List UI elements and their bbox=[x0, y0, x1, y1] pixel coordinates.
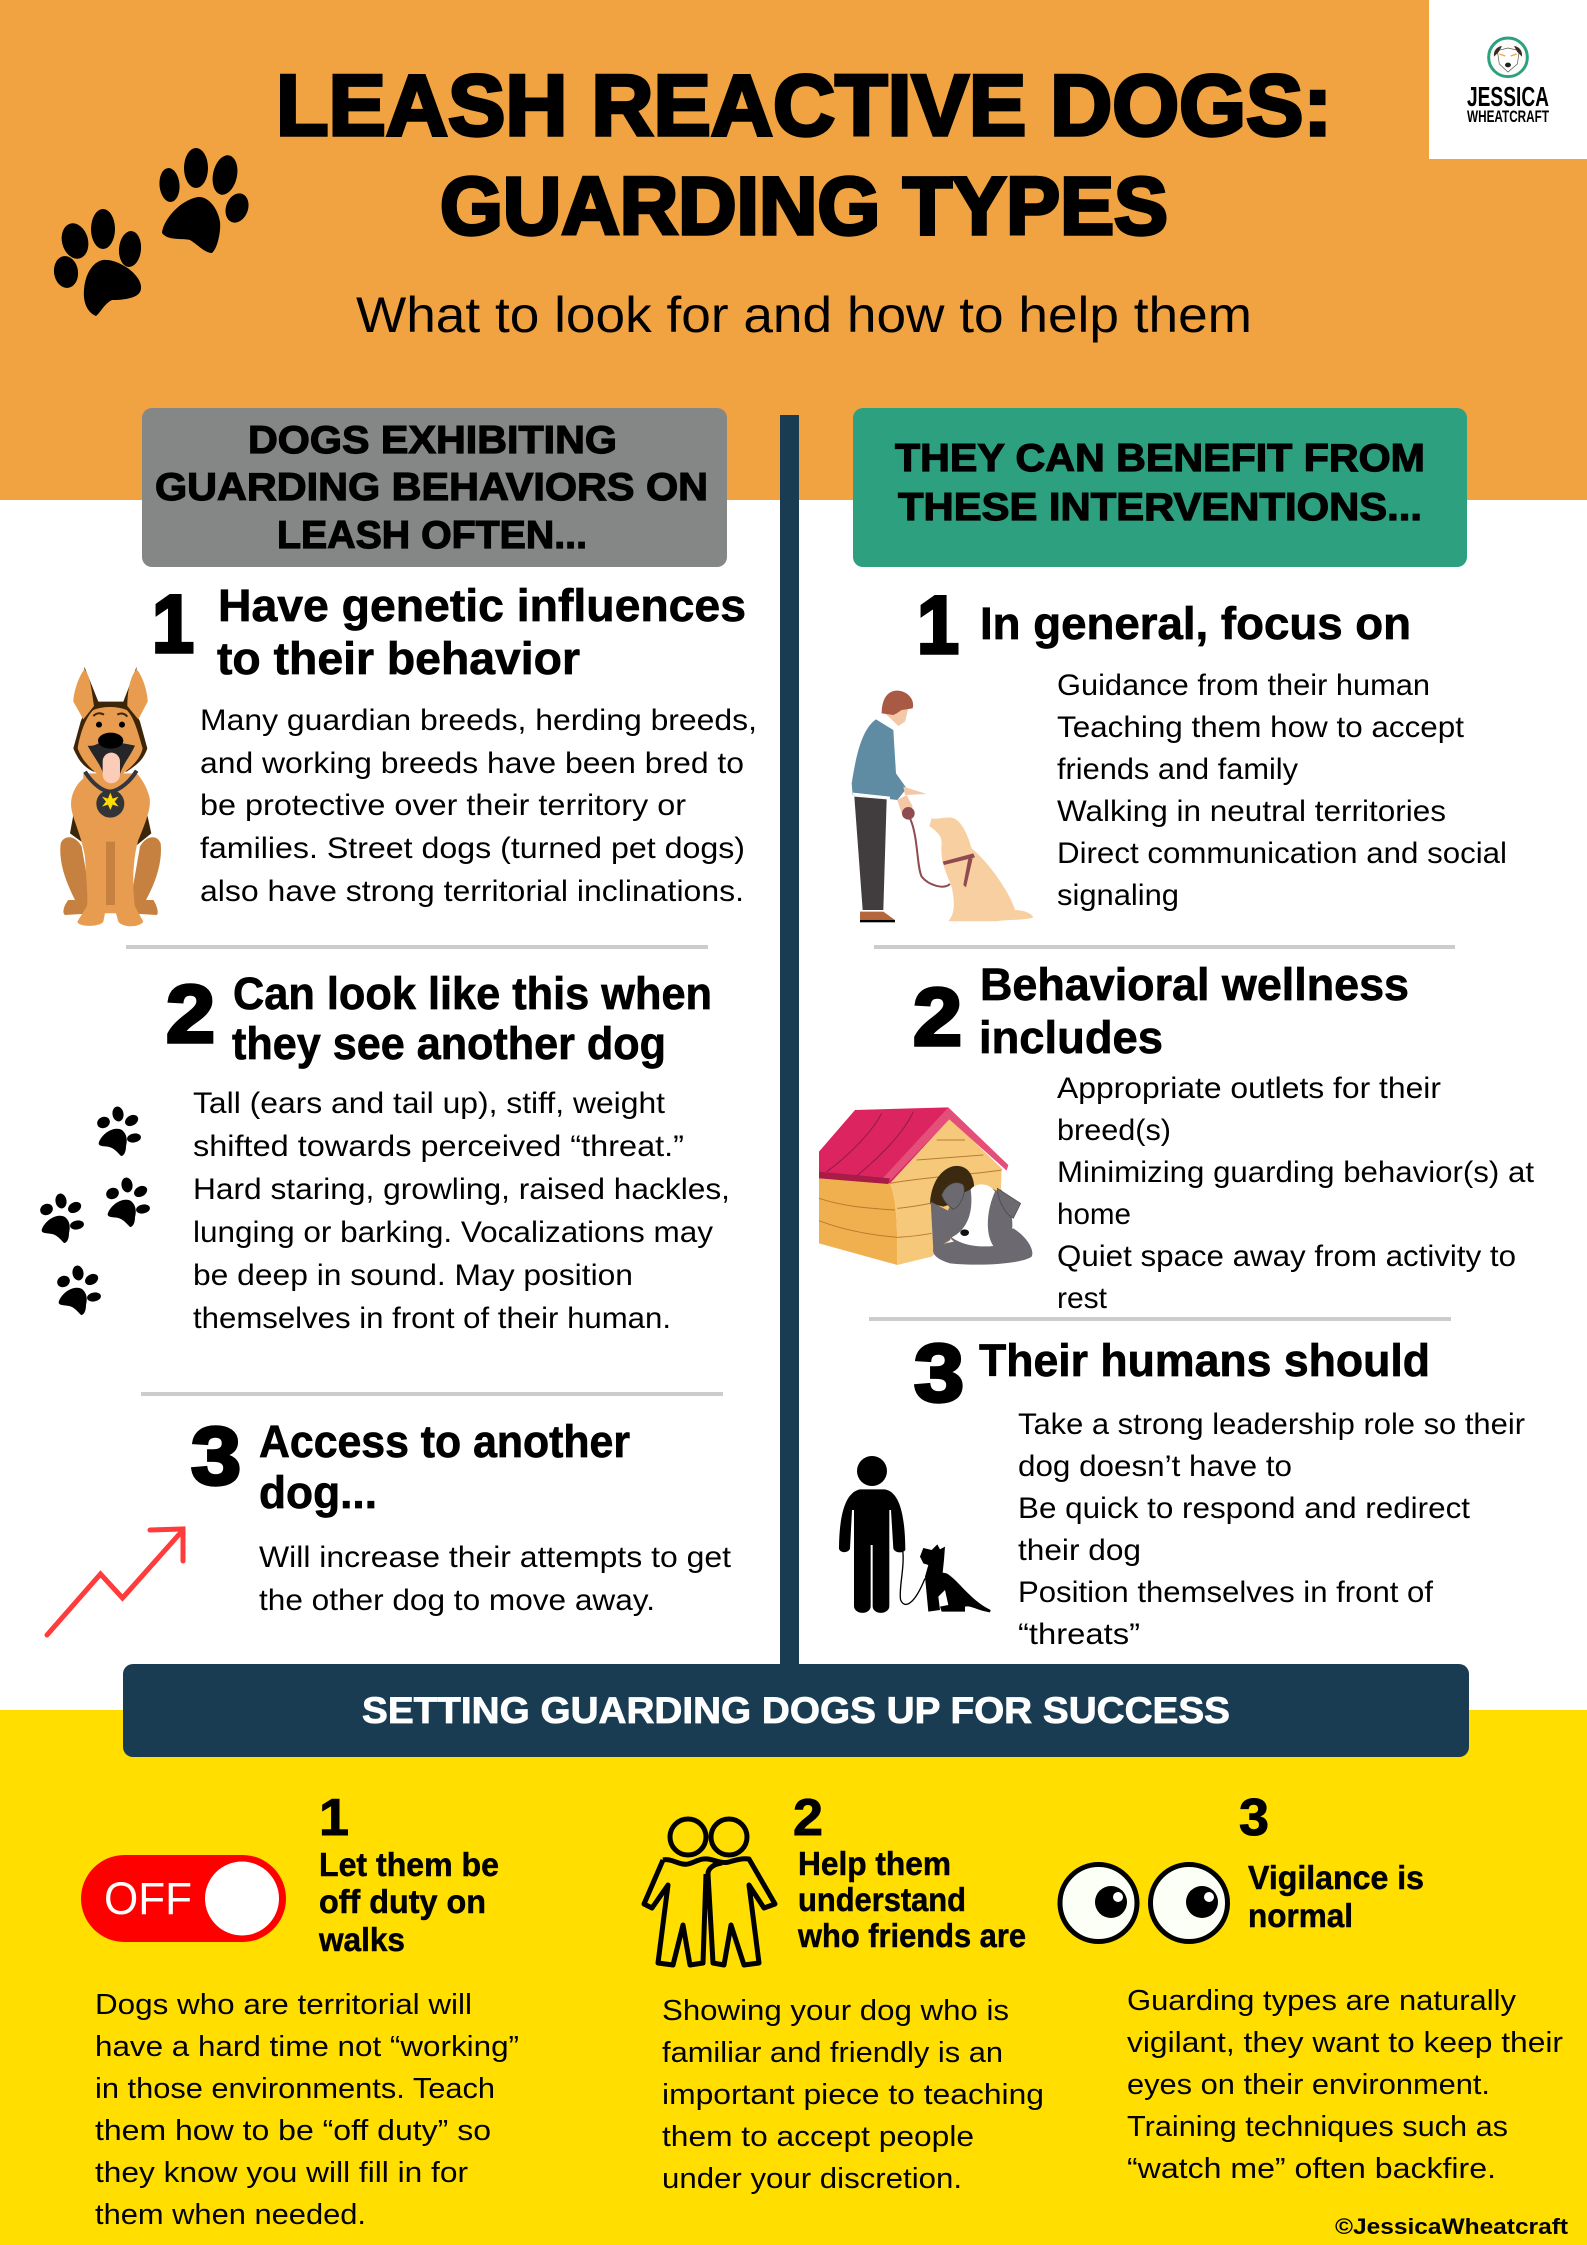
panel: left heading box: GUARDING BEHAVIORS ON bbox=[155, 466, 708, 509]
copyright credit: ©JessicaWheatcraft bbox=[1335, 2214, 1569, 2239]
body text: “threats” bbox=[1018, 1618, 1140, 1651]
panel: left item 1 bbox=[60, 579, 757, 926]
heading: Can look like this when bbox=[233, 968, 712, 1019]
icon: large paw prints bbox=[52, 148, 252, 316]
body text: under your discretion. bbox=[662, 2163, 962, 2195]
panel: right item 1 bbox=[852, 580, 1507, 922]
heading: Behavioral wellness bbox=[980, 959, 1409, 1010]
body text: be deep in sound. May position bbox=[193, 1259, 633, 1292]
body text bbox=[1057, 1072, 1535, 1315]
body text: Teaching them how to accept bbox=[1057, 711, 1465, 744]
number 1: 1 bbox=[917, 580, 959, 671]
body text: Dogs who are territorial will bbox=[95, 1989, 472, 2021]
body text: breed(s) bbox=[1057, 1114, 1171, 1147]
body text: rest bbox=[1057, 1282, 1108, 1315]
icon: small paw prints bbox=[38, 1106, 151, 1315]
body text: important piece to teaching bbox=[662, 2079, 1044, 2111]
body text: themselves in front of their human. bbox=[193, 1302, 671, 1335]
body text: them to accept people bbox=[662, 2121, 974, 2153]
body text: Training techniques such as bbox=[1127, 2111, 1508, 2143]
body text: shifted towards perceived “threat.” bbox=[193, 1130, 684, 1163]
body text: home bbox=[1057, 1198, 1131, 1231]
body text bbox=[1127, 1985, 1563, 2185]
heading: they see another dog bbox=[232, 1018, 666, 1069]
divider bbox=[874, 945, 1455, 949]
divider bbox=[126, 945, 708, 949]
body text: Be quick to respond and redirect bbox=[1018, 1492, 1471, 1525]
heading bbox=[217, 580, 746, 684]
icon: off toggle bbox=[81, 1855, 286, 1942]
logo wordmark: JESSICA bbox=[1467, 81, 1549, 112]
panel: right item 2 bbox=[819, 959, 1535, 1315]
body text: Many guardian breeds, herding breeds, bbox=[200, 704, 757, 737]
heading: Let them be bbox=[319, 1846, 499, 1883]
panel: left item 2 bbox=[38, 968, 730, 1335]
number 1: 1 bbox=[319, 1789, 349, 1847]
body text: Walking in neutral territories bbox=[1057, 795, 1446, 828]
body text bbox=[193, 1087, 730, 1335]
body text: dog doesn’t have to bbox=[1018, 1450, 1292, 1483]
body text: them when needed. bbox=[95, 2199, 366, 2231]
divider bbox=[869, 1317, 1451, 1321]
body text: the other dog to move away. bbox=[259, 1584, 655, 1617]
body text bbox=[1057, 669, 1507, 912]
number 1: 1 bbox=[152, 579, 194, 670]
body text: “watch me” often backfire. bbox=[1127, 2153, 1496, 2185]
heading: Vigilance is bbox=[1248, 1859, 1424, 1896]
body text: have a hard time not “working” bbox=[95, 2031, 519, 2063]
heading: Access to another bbox=[259, 1416, 630, 1467]
central divider bar bbox=[780, 415, 799, 1670]
body text: friends and family bbox=[1057, 753, 1298, 786]
heading bbox=[979, 959, 1409, 1063]
heading: who friends are bbox=[797, 1917, 1026, 1954]
body text: Quiet space away from activity to bbox=[1057, 1240, 1516, 1273]
body text: Tall (ears and tail up), stiff, weight bbox=[193, 1087, 666, 1120]
heading: Help them bbox=[798, 1845, 951, 1882]
number 3: 3 bbox=[914, 1328, 964, 1419]
panel: right heading box bbox=[853, 408, 1467, 567]
heading: dog... bbox=[259, 1467, 377, 1518]
body text: signaling bbox=[1057, 879, 1179, 912]
title: LEASH REACTIVE DOGS: bbox=[276, 58, 1332, 154]
panel: left heading box bbox=[142, 408, 727, 567]
panel: success tip 3 bbox=[1060, 1789, 1563, 2185]
body text: vigilant, they want to keep their bbox=[1127, 2027, 1563, 2059]
icon: off toggle: OFF bbox=[104, 1873, 192, 1924]
panel: right heading box: THEY CAN BENEFIT FROM bbox=[895, 437, 1425, 480]
title bbox=[276, 58, 1332, 252]
yellow footer background bbox=[0, 1710, 1587, 2245]
body text: familiar and friendly is an bbox=[662, 2037, 1003, 2069]
section banner bbox=[123, 1664, 1469, 1757]
number 3: 3 bbox=[1239, 1789, 1269, 1847]
body text: also have strong territorial inclinations. bbox=[200, 875, 744, 908]
body text bbox=[259, 1541, 732, 1617]
body text bbox=[95, 1989, 519, 2231]
number 3: 3 bbox=[191, 1411, 241, 1502]
panel: success tip 2 bbox=[644, 1789, 1044, 2195]
number 2: 2 bbox=[913, 972, 962, 1063]
heading: walks bbox=[318, 1921, 405, 1958]
heading: includes bbox=[979, 1012, 1163, 1063]
icon: German shepherd bbox=[60, 667, 161, 926]
icon: man with leashed dog bbox=[852, 691, 1033, 922]
body text: Guarding types are naturally bbox=[1127, 1985, 1517, 2017]
divider bbox=[141, 1392, 723, 1396]
body text: Minimizing guarding behavior(s) at bbox=[1057, 1156, 1535, 1189]
icon: person and dog silhouette bbox=[839, 1456, 991, 1613]
heading: In general, focus on bbox=[980, 598, 1411, 649]
body text: be protective over their territory or bbox=[200, 789, 686, 822]
panel: success tip 1 bbox=[81, 1789, 519, 2231]
number 2: 2 bbox=[793, 1789, 823, 1847]
icon: red rising arrow bbox=[47, 1529, 183, 1635]
heading bbox=[259, 1416, 630, 1518]
body text: Take a strong leadership role so their bbox=[1018, 1408, 1525, 1441]
header background bbox=[0, 0, 1587, 500]
body text: Guidance from their human bbox=[1057, 669, 1430, 702]
panel: right item 3 bbox=[839, 1328, 1525, 1651]
section banner: SETTING GUARDING DOGS UP FOR SUCCESS bbox=[362, 1690, 1230, 1731]
body text: and working breeds have been bred to bbox=[200, 747, 744, 780]
heading: Have genetic influences bbox=[218, 580, 746, 631]
body text: them how to be “off duty” so bbox=[95, 2115, 491, 2147]
body text: families. Street dogs (turned pet dogs) bbox=[200, 832, 745, 865]
body text bbox=[200, 704, 757, 908]
title: GUARDING TYPES bbox=[440, 161, 1168, 252]
body text: Showing your dog who is bbox=[662, 1995, 1009, 2027]
heading bbox=[1248, 1859, 1424, 1934]
heading: understand bbox=[798, 1881, 966, 1918]
logo: dog face badge bbox=[1489, 38, 1527, 77]
icon: two friends outline bbox=[644, 1819, 775, 1965]
body text: in those environments. Teach bbox=[95, 2073, 495, 2105]
logo wordmark: WHEATCRAFT bbox=[1467, 107, 1549, 126]
body text: Will increase their attempts to get bbox=[259, 1541, 732, 1574]
logo wordmark bbox=[1467, 81, 1549, 126]
heading: to their behavior bbox=[217, 633, 580, 684]
heading bbox=[232, 968, 712, 1069]
heading: Their humans should bbox=[979, 1335, 1430, 1386]
icon: dog house with sleeping dog bbox=[819, 1107, 1032, 1265]
body text: lunging or barking. Vocalizations may bbox=[193, 1216, 713, 1249]
logo bbox=[1429, 0, 1587, 159]
icon: cartoon eyes bbox=[1060, 1864, 1228, 1942]
number 2: 2 bbox=[166, 969, 215, 1060]
body text: they know you will fill in for bbox=[95, 2157, 468, 2189]
heading: normal bbox=[1248, 1897, 1353, 1934]
body text: eyes on their environment. bbox=[1127, 2069, 1490, 2101]
body text: their dog bbox=[1018, 1534, 1141, 1567]
panel: left heading box: LEASH OFTEN... bbox=[277, 514, 587, 557]
body text: Position themselves in front of bbox=[1018, 1576, 1434, 1609]
body text bbox=[662, 1995, 1044, 2195]
heading bbox=[797, 1845, 1026, 1954]
panel: right heading box: THESE INTERVENTIONS... bbox=[898, 486, 1422, 529]
heading: off duty on bbox=[319, 1883, 486, 1920]
body text: Direct communication and social bbox=[1057, 837, 1507, 870]
panel: left item 3 bbox=[47, 1411, 732, 1635]
panel: left heading box: DOGS EXHIBITING bbox=[248, 419, 617, 462]
subtitle: What to look for and how to help them bbox=[356, 287, 1252, 343]
body text: Appropriate outlets for their bbox=[1057, 1072, 1441, 1105]
body text bbox=[1018, 1408, 1525, 1651]
heading bbox=[318, 1846, 499, 1958]
body text: Hard staring, growling, raised hackles, bbox=[193, 1173, 730, 1206]
